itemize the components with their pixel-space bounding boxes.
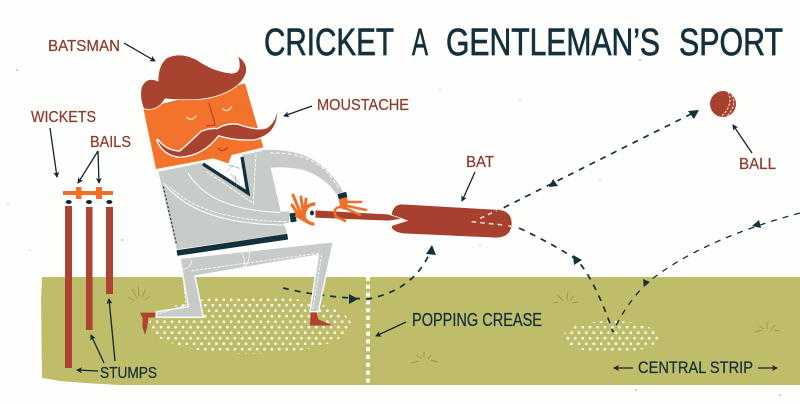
rear hand xyxy=(335,192,366,221)
label: bat: BAT xyxy=(466,154,495,171)
title: A xyxy=(412,22,428,64)
title: CRICKET xyxy=(264,22,394,64)
arrow: batsman xyxy=(124,43,155,61)
head xyxy=(141,55,277,169)
body and clothes xyxy=(140,150,333,335)
stump tops xyxy=(66,200,112,204)
back arm xyxy=(262,150,343,194)
right shoe xyxy=(310,312,333,326)
left shoe xyxy=(140,313,155,335)
bat handle xyxy=(315,210,403,221)
ball trajectories xyxy=(283,110,800,332)
moustache xyxy=(157,112,277,157)
hair xyxy=(141,55,246,109)
arrow: wickets xyxy=(50,128,57,177)
mouth xyxy=(218,147,227,151)
label: popping crease: POPPING CREASE xyxy=(412,310,542,330)
dark left side stitching xyxy=(163,187,177,245)
bails xyxy=(63,187,113,199)
trouser stitching xyxy=(158,253,322,314)
arrow: bat xyxy=(462,172,475,201)
torso and front arm xyxy=(158,150,289,249)
dotted batting area xyxy=(149,296,351,354)
front hand xyxy=(289,195,314,224)
label: stumps: STUMPS xyxy=(100,365,157,382)
trousers xyxy=(157,242,333,317)
ball xyxy=(710,91,736,117)
eyes xyxy=(187,107,232,119)
arrows: bails xyxy=(78,151,99,183)
arrows: stumps xyxy=(77,299,115,371)
arrow: popping crease xyxy=(376,322,406,336)
trajectory arrowheads xyxy=(349,110,761,304)
dotted central strip area xyxy=(563,321,659,353)
label: wickets: WICKETS xyxy=(31,109,96,126)
arrow: ball xyxy=(733,125,752,153)
label: batsman: BATSMAN xyxy=(48,38,120,55)
label: ball: BALL xyxy=(739,156,776,173)
shirt collar V xyxy=(203,155,248,193)
arrows: central strip xyxy=(614,367,777,369)
arrow: moustache xyxy=(284,106,312,116)
wicket set xyxy=(63,187,113,368)
belt xyxy=(177,237,288,253)
bat xyxy=(392,204,512,238)
face xyxy=(143,83,263,169)
ground: pitch xyxy=(41,277,800,385)
grass tufts xyxy=(128,286,780,363)
popping crease line xyxy=(366,277,370,385)
nose xyxy=(206,103,215,126)
title xyxy=(264,22,783,64)
sleeve stitching xyxy=(164,153,287,225)
stumps xyxy=(65,206,113,368)
label: central strip: CENTRAL STRIP xyxy=(638,358,753,377)
batsman xyxy=(140,55,512,335)
label: moustache: MOUSTACHE xyxy=(317,97,409,114)
title: GENTLEMAN’S xyxy=(446,22,660,64)
label: bails: BAILS xyxy=(90,134,131,151)
